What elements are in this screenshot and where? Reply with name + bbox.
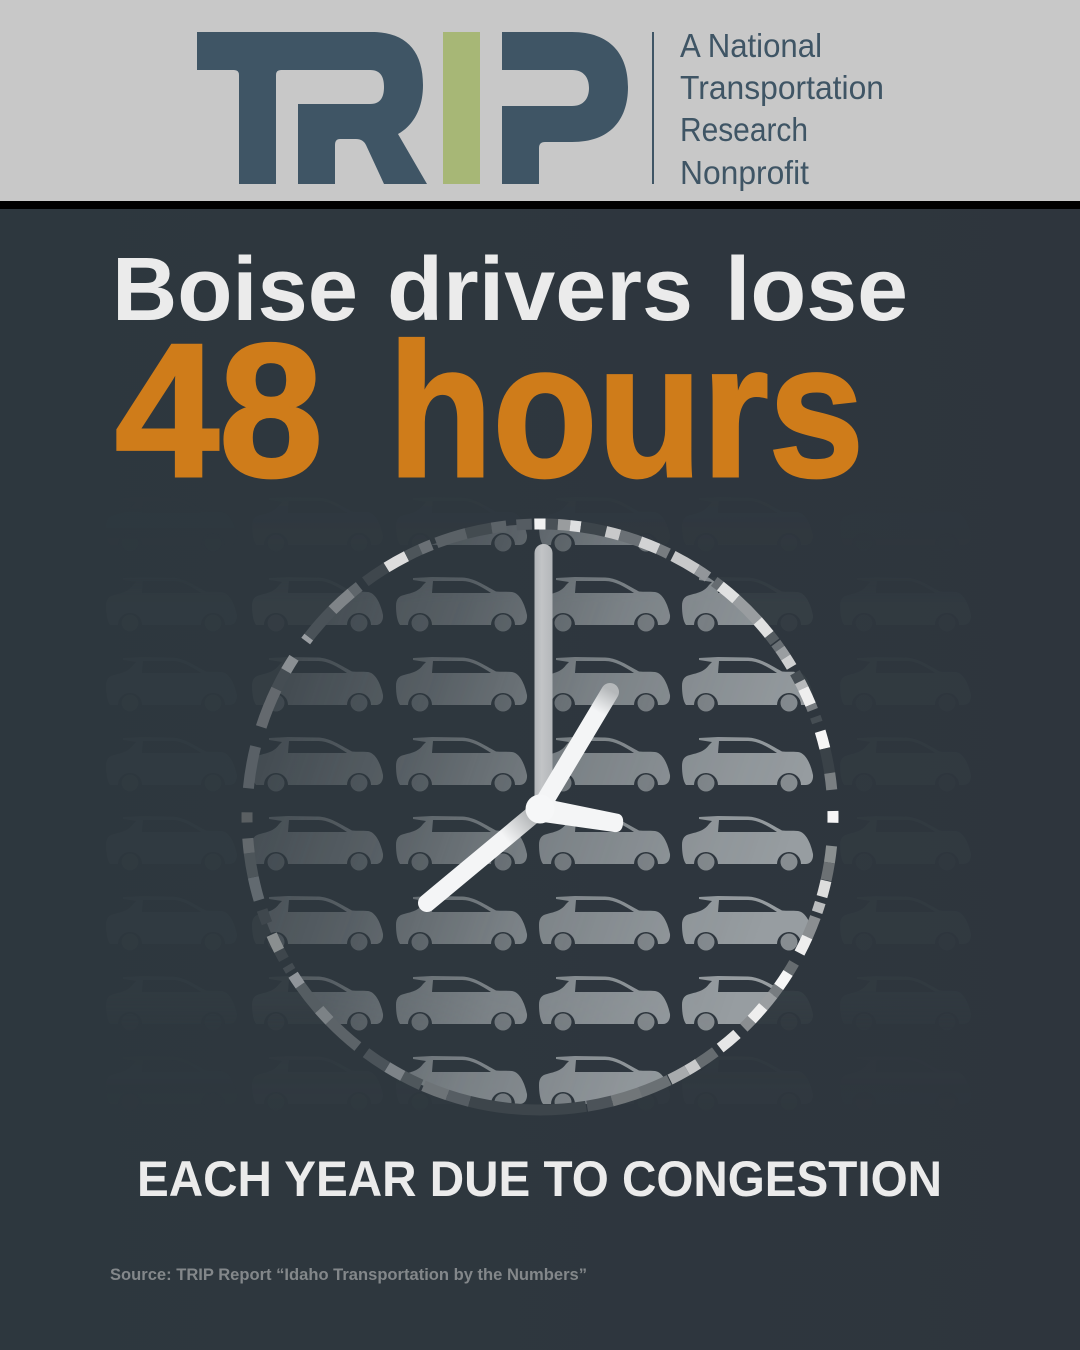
clock ring <box>247 524 833 1110</box>
dim car grid <box>258 600 812 994</box>
TRIP logo <box>197 32 628 184</box>
faint outer cars <box>106 497 971 1110</box>
hub <box>526 794 554 824</box>
big number <box>115 305 864 517</box>
lower left hand <box>427 809 540 903</box>
headline: Boise <box>112 240 358 340</box>
big number: 48 <box>115 305 323 517</box>
clock hands <box>427 544 623 903</box>
logo tagline: Transportation <box>680 69 884 106</box>
logo tagline <box>680 27 884 191</box>
logo tagline: A National <box>680 27 822 64</box>
logo tagline: Research <box>680 111 808 148</box>
upper hand <box>540 692 610 809</box>
headline <box>112 240 908 340</box>
logo divider <box>652 32 654 184</box>
headline: lose <box>725 240 908 340</box>
subheading: EACH YEAR DUE TO CONGESTION <box>137 1151 942 1207</box>
header band <box>0 0 1080 209</box>
right hand <box>536 797 623 832</box>
minute hand <box>534 544 552 812</box>
big number: hours <box>388 305 864 517</box>
headline: drivers <box>387 240 693 340</box>
source note: Source: TRIP Report “Idaho Transportation by the Numbers” <box>110 1266 587 1284</box>
logo tagline: Nonprofit <box>680 154 809 191</box>
bright cars inside clock <box>252 497 813 1110</box>
